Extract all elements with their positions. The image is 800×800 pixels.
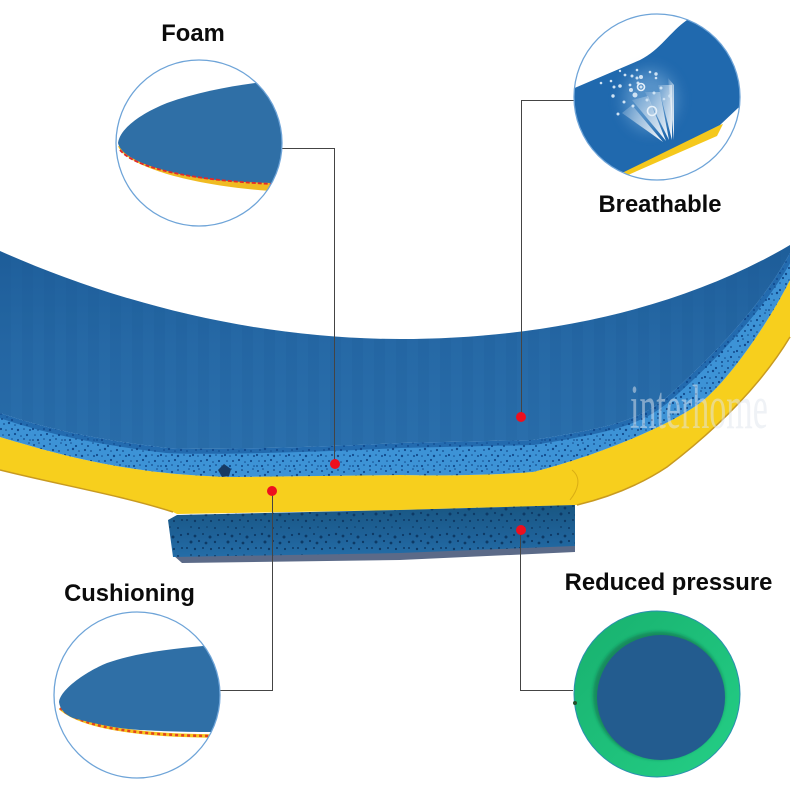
heading: Foam: Foam [161,20,225,47]
marker: reduced pressure [516,525,526,535]
heading: Breathable: Breathable [598,191,722,218]
small dark mark [573,701,577,705]
insole cross-section [0,245,800,563]
watermark: interhome: interhome [630,372,768,442]
layer: dark blue sole foam [168,505,575,557]
panel: breathable detail circle [573,13,741,181]
leader line: foam [282,148,334,464]
blue insole surface [118,83,290,183]
marker: foam [330,459,340,469]
heading: Cushioning: Cushioning [64,580,195,607]
marker: cushioning [267,486,277,496]
large bubbles [638,84,656,116]
leader line: cushioning [219,490,272,690]
foam defect mark [218,464,231,477]
blue insole surface [574,20,740,172]
blue inner disc [597,635,725,760]
yellow lower edge [0,337,790,512]
air bubbles [600,69,672,116]
yellow edge [622,124,723,175]
inner shadow [593,632,725,760]
marker: breathable [516,412,526,422]
yellow edge [118,146,271,191]
panel: cushioning detail circle [54,612,225,778]
panel: foam detail circle [116,60,290,226]
yellow seam [570,470,578,500]
leader line: breathable [522,100,574,417]
yellow and red edge [60,708,210,736]
layer: blue top fabric [0,245,790,449]
panel: reduced pressure detail circle [573,611,740,777]
red stitching [120,150,272,184]
green outer disc [574,611,740,777]
air glow [624,70,676,130]
layer: yellow foam [0,280,790,514]
layer: grey sole base [173,544,575,563]
layer: light blue porous foam [0,250,800,485]
blue insole surface [59,646,225,732]
leader line: reduced pressure [520,530,573,690]
heading: Reduced pressure: Reduced pressure [565,569,772,596]
air rays [622,78,674,142]
